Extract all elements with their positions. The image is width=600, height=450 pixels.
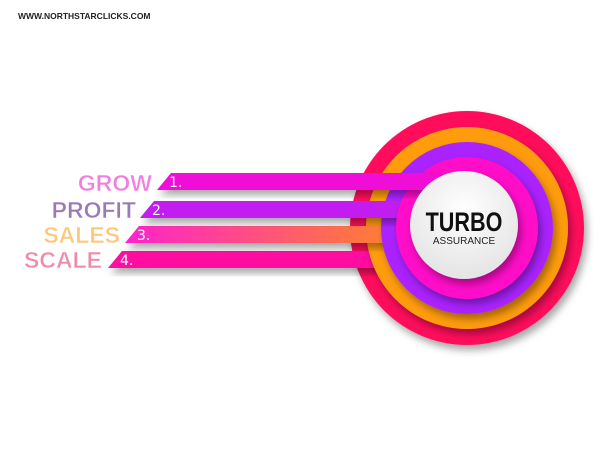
bar 1: grow — [157, 173, 440, 191]
bar 3: sales: 3. — [137, 228, 150, 244]
ring: red — [350, 111, 584, 345]
bar 4: scale: 4. — [120, 253, 133, 269]
website url: WWW.NORTHSTARCLICKS.COM — [18, 11, 151, 21]
center white circle — [410, 171, 518, 279]
center title: TURBO — [426, 208, 502, 238]
bar 4: scale — [108, 251, 420, 269]
ring: purple — [381, 142, 553, 314]
center title: ASSURANCE — [433, 236, 495, 247]
labels — [24, 170, 152, 273]
ring: orange — [366, 127, 568, 329]
ring graphic — [108, 111, 584, 345]
bar 2: profit: 2. — [152, 203, 165, 219]
bar 1: grow: 1. — [169, 175, 182, 191]
label: profit: PROFIT — [52, 197, 136, 223]
label: sales: SALES — [43, 222, 120, 248]
label: grow: GROW — [78, 170, 152, 196]
ring: magenta — [396, 157, 538, 299]
bar 2: profit — [140, 201, 430, 219]
label: scale: SCALE — [24, 247, 102, 273]
bar 3: sales — [125, 226, 420, 244]
